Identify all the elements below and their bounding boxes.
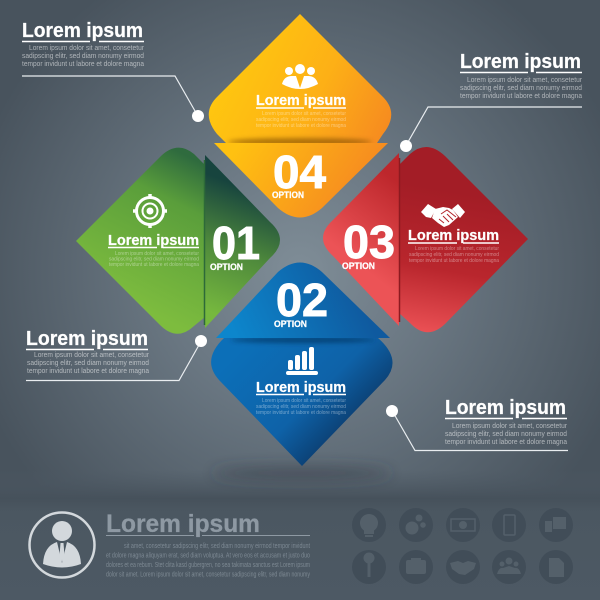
- option label: OPTION: [210, 262, 243, 273]
- callout: bottom right: Lorem ipsum dolor sit amet, consetetur: [452, 423, 568, 430]
- text block: bottom: sit amet, consetetur sadipscing elitr, sed diam nonumy eirmod tempor invidunt: [124, 543, 310, 550]
- icon grid: [352, 508, 573, 584]
- number 04: 04: [273, 146, 326, 198]
- panel: option 02 blue: [211, 262, 393, 466]
- icon: phone: [504, 515, 515, 535]
- icon: bulb: [360, 514, 378, 537]
- text block: red: [409, 246, 499, 264]
- text block: green: Lorem ipsum dolor sit amet, consetetur: [115, 251, 199, 257]
- text block: yellow: tempor invidunt ut labore et dolore magna: [256, 123, 346, 129]
- text block: red: Lorem ipsum dolor sit amet, consetetur: [415, 246, 499, 252]
- callout: bottom right: Lorem ipsum: [445, 397, 566, 419]
- icon: handshake: [421, 204, 465, 227]
- icon: target: [133, 194, 167, 228]
- icon: gears: [406, 514, 426, 534]
- text block: blue: [256, 398, 346, 416]
- text block: bottom: et dolore magna aliquyam erat, sed diam voluptua. At vero eos et accusam et justo duo: [106, 552, 310, 560]
- icon: banknote: [451, 519, 475, 531]
- option label: OPTION: [342, 261, 375, 272]
- callout: top left: [22, 20, 204, 122]
- panel: option 04 yellow: [209, 14, 391, 218]
- icon: bar chart: [286, 347, 318, 375]
- callout: middle left: Lorem ipsum dolor sit amet, consetetur: [34, 352, 150, 359]
- callout: top right: Lorem ipsum dolor sit amet, consetetur: [467, 77, 583, 84]
- heading: green: Lorem ipsum: [108, 232, 199, 249]
- icon: businessman: [30, 512, 94, 578]
- text block: blue: Lorem ipsum dolor sit amet, consetetur: [262, 398, 346, 404]
- callout: bottom right: tempor invidunt ut labore et dolore magna: [445, 439, 567, 446]
- number 02: 02: [276, 274, 328, 326]
- floor shadow: [212, 466, 392, 480]
- icon: handshake small: [450, 561, 476, 575]
- text block: blue: sadipscing elitr, sed diam nonumy eirmod: [256, 404, 346, 410]
- number 03: 03: [343, 216, 395, 268]
- callout: bottom right: [386, 397, 568, 450]
- callout: middle left: sadipscing elitr, sed diam nonumy eirmod: [27, 360, 149, 367]
- option label: OPTION: [274, 319, 307, 330]
- callout: top right: Lorem ipsum: [460, 51, 581, 73]
- text block: yellow: [256, 111, 346, 129]
- panel: option 03 red: [323, 147, 528, 332]
- panel: option 01 green: [76, 148, 280, 334]
- heading: yellow: Lorem ipsum: [256, 92, 346, 109]
- callout: middle left: tempor invidunt ut labore et dolore magna: [27, 368, 149, 375]
- callout: top right: tempor invidunt ut labore et dolore magna: [460, 93, 582, 100]
- icon: team small: [497, 558, 521, 574]
- text block: red: tempor invidunt ut labore et dolore magna: [409, 258, 499, 264]
- icon: chat: [545, 517, 566, 532]
- text block: yellow: sadipscing elitr, sed diam nonumy eirmod: [256, 117, 346, 123]
- number 01: 01: [212, 217, 260, 269]
- callout: top right: sadipscing elitr, sed diam nonumy eirmod: [460, 85, 582, 92]
- text block: green: tempor invidunt ut labore et dolore magna: [109, 262, 199, 268]
- callout: top right: [400, 51, 583, 152]
- text block: bottom: dolores et ea rebum. Stet clita kasd gubergren, no sea takimata sanctus est Lorem ipsum: [106, 562, 310, 569]
- callout: top left: sadipscing elitr, sed diam nonumy eirmod: [22, 53, 144, 60]
- text block: blue: tempor invidunt ut labore et dolore magna: [256, 410, 346, 416]
- callout: top left: Lorem ipsum dolor sit amet, consetetur: [29, 45, 145, 52]
- text block: bottom: dolor sit amet. Lorem ipsum dolor sit amet, consetetur sadipscing elitr, sed diam nonumy: [106, 572, 310, 578]
- heading: red: Lorem ipsum: [408, 227, 499, 244]
- icon: briefcase: [406, 558, 426, 574]
- heading: bottom: Lorem ipsum: [106, 510, 260, 538]
- option label: OPTION: [272, 190, 304, 201]
- icon: key: [364, 552, 374, 577]
- callout: bottom right: sadipscing elitr, sed diam nonumy eirmod: [445, 431, 567, 438]
- callout: top left: tempor invidunt ut labore et dolore magna: [22, 61, 144, 68]
- callout: middle left: Lorem ipsum: [26, 328, 148, 350]
- text block: green: [109, 251, 199, 268]
- text block: yellow: Lorem ipsum dolor sit amet, consetetur: [262, 111, 346, 117]
- text block: red: sadipscing elitr, sed diam nonumy eirmod: [409, 252, 499, 258]
- heading: blue: Lorem ipsum: [256, 379, 346, 396]
- text block: bottom: [106, 536, 310, 578]
- icon: team: [282, 64, 318, 89]
- icon: document: [549, 558, 564, 577]
- text block: green: sadipscing elitr, sed diam nonumy eirmod: [109, 256, 199, 262]
- callout: top left: Lorem ipsum: [22, 20, 143, 42]
- callout: middle left: [26, 328, 207, 380]
